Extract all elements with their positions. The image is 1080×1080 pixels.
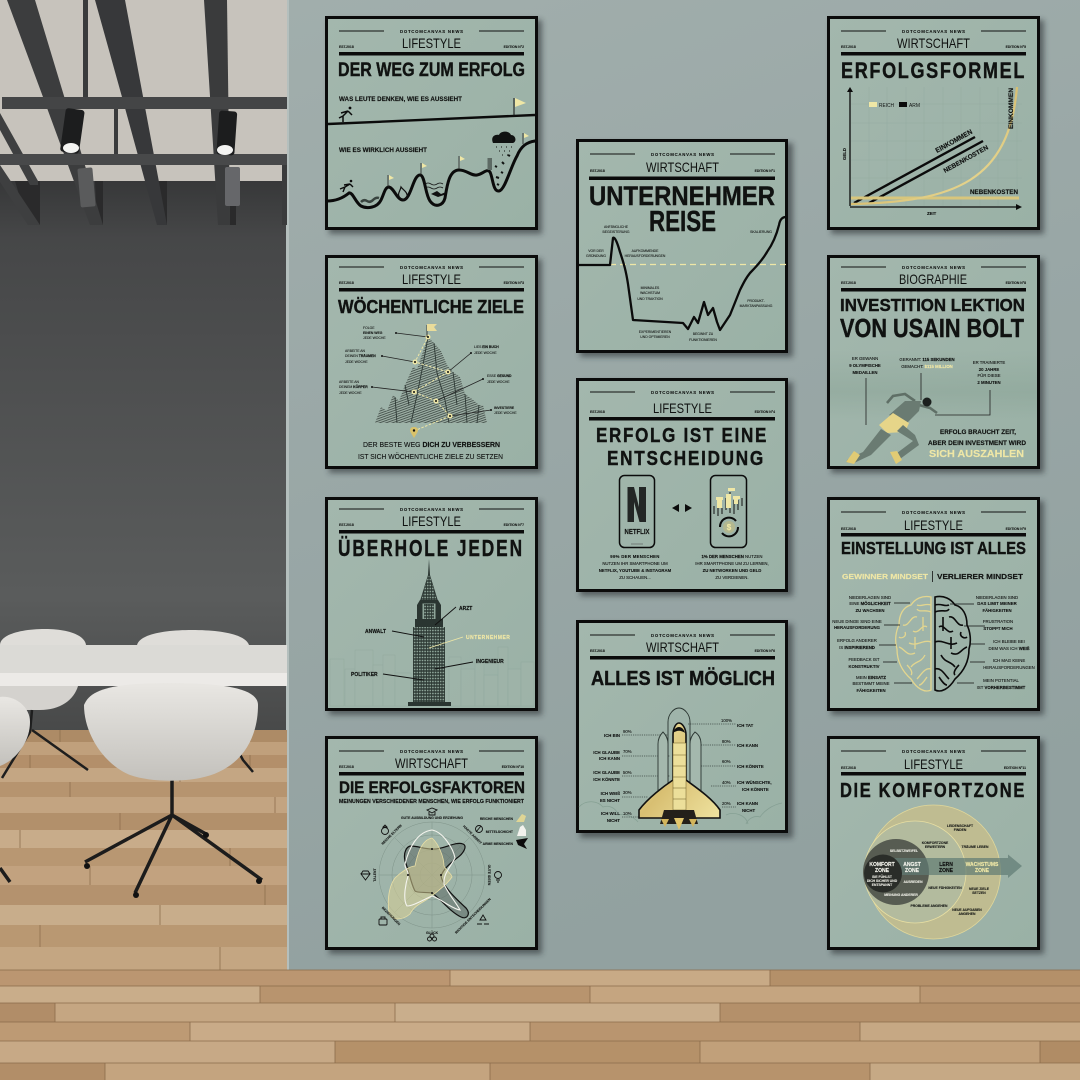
header: EST.2018 — [590, 410, 605, 414]
closing statement — [928, 429, 1026, 460]
flags and obstacles — [340, 132, 529, 202]
callouts: ARBEITE AN — [339, 380, 360, 384]
zone details: ANGEHEN — [959, 912, 976, 916]
title — [840, 295, 1025, 343]
callouts: JEDE WOCHE — [339, 391, 362, 395]
header: EST.2018 — [339, 523, 354, 527]
front chair — [0, 683, 262, 898]
right statements: FÄHIGKEITEN — [982, 608, 1012, 613]
right labels: 20% — [722, 801, 731, 806]
zone labels: ZONE — [939, 868, 954, 874]
brain: gold half — [896, 596, 931, 691]
journey labels: PRODUKT- — [747, 299, 765, 303]
zone details: ENTSPANNT — [872, 883, 893, 887]
left statements: IS INSPIRIEREND — [839, 645, 875, 650]
header: DOTCOMCANVAS NEWS — [902, 749, 965, 754]
header: EST.2018 — [339, 281, 354, 285]
callouts: JEDE WOCHE — [363, 336, 386, 340]
radar axis labels: GUTE AUSBILDUNG UND ERZIEHUNG — [401, 816, 463, 820]
right statements: DEM WAS ICH WEIß — [989, 646, 1030, 651]
text left: ZU SCHAUEN... — [619, 575, 651, 580]
header: EST.2018 — [841, 766, 856, 770]
header: EDITION N°6 — [755, 649, 775, 653]
header: EDITION N°1 — [755, 169, 775, 173]
zone details: LEIDENSCHAFT — [947, 824, 974, 828]
header: WIRTSCHAFT — [646, 159, 719, 175]
subtitle: MEINUNGEN VERSCHIEDENER MENSCHEN, WIE ERFOLG FUNKTIONIERT — [339, 799, 524, 805]
left labels: 70% — [623, 749, 632, 754]
journey labels: HERAUSFORDERUNGEN — [625, 254, 666, 258]
header: EDITION N°7 — [504, 523, 524, 527]
title: ERFOLG IST EINE — [596, 425, 768, 447]
left statements: ERFOLG ANDERER — [837, 638, 877, 643]
phone: investment: $ — [727, 523, 732, 532]
header: EST.2018 — [339, 765, 354, 769]
right labels: NICHT — [742, 808, 756, 813]
dotted guide lines — [622, 724, 736, 817]
header — [339, 749, 524, 776]
closing statement: ABER DEIN INVESTMENT WIRD — [928, 440, 1026, 447]
panel: Einstellung ist alles — [827, 497, 1040, 711]
text right: ZU NETWORKEN UND GELD — [703, 568, 761, 573]
left labels: 50% — [623, 770, 632, 775]
header: EDITION N°3 — [504, 281, 524, 285]
text left: NUTZEN IHR SMARTPHONE UM — [602, 561, 668, 566]
title: ALLES IST MÖGLICH — [591, 667, 775, 690]
header: EDITION N°10 — [502, 765, 524, 769]
winding path — [327, 141, 535, 208]
panel: Die Erfolgsfaktoren — [325, 736, 538, 950]
header: LIFESTYLE — [402, 35, 461, 51]
radar axis labels: BEZIEHUNGEN — [381, 906, 402, 927]
fact texts: 2 MINUTEN — [977, 380, 1001, 385]
journey labels: UND OPTIMIEREN — [640, 335, 670, 339]
left labels: 90% — [623, 729, 632, 734]
title: ERFOLGSFORMEL — [841, 58, 1026, 83]
fact texts: MEDAILLEN — [852, 370, 878, 375]
title — [589, 181, 775, 238]
header: WIRTSCHAFT — [897, 35, 970, 51]
fact texts: ER GEWANN — [852, 356, 878, 361]
fact texts — [849, 356, 1005, 385]
journey labels: ANFÄNGLICHE — [604, 225, 629, 229]
header — [841, 265, 1026, 292]
legend: ARM — [909, 103, 920, 109]
legend — [480, 814, 528, 849]
header: WIRTSCHAFT — [395, 755, 468, 771]
callouts: LIES EIN BUCH — [474, 345, 499, 349]
zone details: NEUE ZIELE — [969, 887, 990, 891]
header: DOTCOMCANVAS NEWS — [902, 510, 965, 515]
header: DOTCOMCANVAS NEWS — [651, 152, 714, 157]
header: LIFESTYLE — [402, 271, 461, 287]
journey labels: BEGINNT ZU — [693, 332, 714, 336]
journey labels: VOR DER — [588, 249, 604, 253]
left statements: HERAUSFORDERUNG — [834, 625, 881, 630]
left statements: EINE MÖGLICHKEIT — [849, 601, 891, 606]
left statements: NEUE DINGE SIND EINE — [832, 619, 882, 624]
title: WÖCHENTLICHE ZIELE — [338, 296, 524, 317]
phone: Netflix — [620, 476, 654, 548]
right labels: ICH WÜNSCHTE, — [737, 780, 772, 785]
header: LIFESTYLE — [402, 513, 461, 529]
right labels: 80% — [722, 739, 731, 744]
header: DOTCOMCANVAS NEWS — [400, 507, 463, 512]
header — [841, 29, 1026, 56]
phone: Netflix: NETFLIX — [624, 529, 650, 536]
title: INVESTITION LEKTION — [840, 295, 1025, 315]
legend — [869, 102, 920, 109]
panel: Wöchentliche Ziele — [325, 255, 538, 469]
fact texts: 9 OLYMPISCHE — [849, 363, 881, 368]
title: ÜBERHOLE JEDEN — [338, 535, 524, 561]
left statements: NIEDERLAGEN SIND — [849, 595, 891, 600]
winding path text: WIE ES WIRKLICH AUSSIEHT — [339, 147, 427, 154]
radar axis labels: TALENT — [373, 868, 377, 882]
clouds — [579, 802, 782, 824]
route and pins — [371, 324, 492, 438]
left statements: FÄHIGKEITEN — [856, 688, 886, 693]
zone labels: WACHSTUMS — [966, 862, 999, 868]
sprinter — [846, 394, 937, 464]
bottom text: IST SICH WÖCHENTLICHE ZIELE ZU SETZEN — [358, 453, 503, 461]
header: EST.2018 — [590, 649, 605, 653]
line chart — [847, 87, 1022, 210]
radar axis labels — [373, 816, 492, 935]
title: DIE ERFOLGSFAKTOREN — [339, 778, 525, 797]
radar chart — [379, 822, 485, 928]
fact texts: GEMACHT: $115 MILLION — [901, 364, 953, 369]
right statements: NIEDERLAGEN SIND — [976, 595, 1018, 600]
labels: ARZT — [459, 606, 472, 612]
header: EDITION N°4 — [755, 410, 775, 414]
right statements: ICH MAG KEINE — [993, 658, 1025, 663]
straight path text: WAS LEUTE DENKEN, WIE ES AUSSIEHT — [339, 96, 462, 103]
journey labels: BEGEISTERUNG — [603, 230, 630, 234]
header: DOTCOMCANVAS NEWS — [651, 633, 714, 638]
callouts: INVESTIERE — [494, 406, 515, 410]
callouts: JEDE WOCHE — [345, 360, 368, 364]
journey labels: SKALIERUNG — [750, 230, 772, 234]
header: EST.2018 — [339, 45, 354, 49]
journey labels: FUNKTIONIEREN — [689, 338, 717, 342]
text right: 1% DER MENSCHEN NUTZEN — [702, 554, 762, 559]
panel: Alles ist möglich — [576, 620, 788, 833]
header — [590, 633, 775, 660]
spotlights — [60, 108, 240, 208]
left floor planks — [0, 730, 287, 971]
title: EINSTELLUNG IST ALLES — [841, 538, 1026, 558]
mindset headings: GEWINNER MINDSET — [842, 572, 928, 581]
header: EDITION N°8 — [1006, 281, 1026, 285]
left labels: ICH BIN — [604, 733, 620, 738]
title: UNTERNEHMER — [589, 181, 775, 211]
closing statement: ERFOLG BRAUCHT ZEIT, — [940, 429, 1016, 436]
panel: Erfolgsformel — [827, 16, 1040, 230]
zone details: ERWEITERN — [925, 845, 946, 849]
legend: REICHE MENSCHEN — [480, 817, 514, 821]
labels: UNTERNEHMER — [466, 635, 510, 641]
chart labels: GELD — [842, 148, 847, 160]
panel: Investition Lektion von Usain Bolt — [827, 255, 1040, 469]
ceiling with beams — [0, 0, 287, 225]
rocket shuttle — [639, 708, 720, 830]
callouts: DEINEM KÖRPER — [339, 384, 368, 389]
title: DIE KOMFORTZONE — [840, 780, 1026, 802]
zone labels: ANGST — [903, 862, 921, 868]
panel: Überhole jeden — [325, 497, 538, 711]
header: LIFESTYLE — [653, 400, 712, 416]
right labels: ICH TAT — [737, 723, 754, 728]
left statements: FEEDBACK IST — [848, 657, 880, 662]
phone: investment — [710, 476, 746, 548]
journey labels: MINIMALES — [641, 286, 660, 290]
zone details: DICH SICHER UND — [867, 879, 898, 883]
zone details: FINDEN — [954, 828, 967, 832]
left labels: ES NICHT — [600, 798, 620, 803]
radar axis labels: HARTE ARBEIT — [462, 824, 483, 846]
journey labels: EXPERIMENTIEREN — [639, 330, 672, 334]
legend: ARME MENSCHEN — [483, 842, 514, 846]
title: DER WEG ZUM ERFOLG — [338, 59, 525, 81]
left labels: ICH KANN — [599, 756, 620, 761]
text left: NETFLIX, YOUTUBE & INSTAGRAM — [599, 568, 672, 573]
skyline — [330, 647, 534, 706]
left labels: NICHT — [607, 818, 620, 823]
right labels: ICH KANN — [737, 743, 758, 748]
header — [339, 29, 524, 56]
chart labels: NEBENKOSTEN — [970, 189, 1018, 196]
left labels: 10% — [623, 811, 632, 816]
background: light wall edge — [286, 0, 289, 971]
header: EDITION N°2 — [504, 45, 524, 49]
journey labels: GRÜNDUNG — [586, 254, 606, 258]
labels: ANWALT — [365, 629, 386, 635]
title: VON USAIN BOLT — [840, 313, 1024, 343]
right labels: 60% — [722, 759, 731, 764]
bottom text: DER BESTE WEG DICH ZU VERBESSERN — [363, 442, 500, 449]
right labels: ICH KANN — [737, 801, 758, 806]
chart labels: ZEIT — [927, 211, 937, 216]
back chairs — [0, 629, 253, 778]
header: DOTCOMCANVAS NEWS — [400, 265, 463, 270]
left labels — [593, 729, 632, 823]
left labels: 30% — [623, 790, 632, 795]
closing statement: SICH AUSZAHLEN — [929, 449, 1024, 460]
header — [339, 507, 524, 534]
labels: INGENIEUR — [476, 659, 504, 665]
journey labels — [586, 225, 773, 342]
header: WIRTSCHAFT — [646, 639, 719, 655]
panel: Der Weg zum Erfolg — [325, 16, 538, 230]
callouts: DEINEN TRÄUMEN — [345, 354, 376, 358]
header: DOTCOMCANVAS NEWS — [902, 265, 965, 270]
title: ENTSCHEIDUNG — [607, 448, 765, 470]
legend: REICH — [879, 103, 894, 109]
header: EDITION N°11 — [1004, 766, 1026, 770]
text left: 99% DER MENSCHEN — [610, 554, 660, 559]
panel: Die Komfortzone — [827, 736, 1040, 950]
header: EST.2018 — [841, 281, 856, 285]
text right: IHR SMARTPHONE UM ZU LERNEN, — [695, 561, 769, 566]
zone details: NEUE AUFGABEN — [952, 908, 982, 912]
zone labels: ZONE — [975, 868, 990, 874]
bottom text — [358, 442, 503, 461]
connector lines — [879, 603, 985, 683]
callouts: ARBEITE AN — [345, 349, 366, 353]
right statements: FRUSTRATION — [983, 619, 1013, 624]
callouts — [339, 326, 517, 415]
radar axis labels: REICHE ELTERN — [381, 823, 403, 846]
brain: black half — [935, 596, 970, 691]
legend: MITTELSCHICHT — [486, 830, 514, 834]
right statements: ICH BLEIBE BEI — [993, 639, 1025, 644]
header: EDITION N°5 — [1006, 45, 1026, 49]
fact texts: GERANNT: 115 SEKUNDEN — [899, 357, 955, 362]
chart labels — [842, 88, 1018, 216]
left labels: ICH KÖNNTE — [593, 777, 620, 782]
radar axis labels: GLÜCK — [426, 930, 439, 935]
labels — [351, 606, 510, 680]
journey labels: WACHSTUM — [640, 291, 660, 295]
header — [841, 510, 1026, 536]
right statements: HERAUSFORDERUNGEN — [983, 665, 1035, 670]
stadium background — [830, 350, 1037, 420]
zone labels: KOMFORT — [869, 862, 895, 868]
zone labels — [869, 862, 999, 874]
zone details — [867, 824, 990, 916]
header — [589, 390, 775, 420]
mindset headings: VERLIERER MINDSET — [937, 572, 1023, 581]
fact texts: FÜR DIESE — [978, 373, 1001, 378]
left statements: ZU WACHSEN — [856, 608, 884, 613]
table — [0, 645, 287, 686]
side chair — [0, 697, 30, 766]
left labels: ICH WEIß — [601, 791, 620, 796]
right labels: ICH KÖNNTE — [737, 764, 764, 769]
nested zones diagram — [863, 805, 1022, 939]
callouts: FOLGE — [363, 326, 375, 330]
header: DOTCOMCANVAS NEWS — [651, 390, 714, 395]
header — [589, 152, 775, 180]
callouts: JEDE WOCHE — [474, 351, 497, 355]
header: EST.2018 — [841, 527, 856, 531]
labels: POLITIKER — [351, 672, 378, 678]
left statements: BESTIMMT MEINE — [853, 681, 890, 686]
radar icons — [361, 808, 502, 941]
header: DOTCOMCANVAS NEWS — [902, 29, 965, 34]
header — [841, 749, 1026, 776]
text right — [695, 554, 769, 580]
right statements: DAS LIMIT MEINER — [977, 601, 1018, 606]
zone details: SELBSTZWEIFEL — [890, 849, 918, 853]
right statements: IST VORHERBESTIMMT — [977, 685, 1026, 690]
header: LIFESTYLE — [904, 517, 963, 533]
straight line with flag — [328, 98, 535, 124]
radar axis labels: GUTE IDEEN — [487, 865, 491, 886]
mountain illustration — [375, 337, 487, 423]
zone details: TRÄUME LEBEN — [962, 845, 989, 849]
right statements: STOPPT MICH — [983, 626, 1013, 631]
radar axis labels: RICHTIGE ENTSCHEIDUNGEN — [454, 897, 492, 935]
journey labels: AUFKOMMENDE — [632, 249, 659, 253]
header: EDITION N°9 — [1006, 527, 1026, 531]
background: right gallery wall — [289, 0, 1080, 971]
dashed average line — [610, 264, 786, 266]
zone labels: ZONE — [875, 868, 890, 874]
callouts: ESSE GESUND — [487, 374, 512, 378]
left labels: ICH GLAUBE — [593, 770, 620, 775]
right labels: 40% — [722, 780, 731, 785]
zone details: MEINUNG ANDERER — [884, 893, 918, 897]
title: REISE — [649, 206, 716, 238]
callouts: JEDE WOCHE — [487, 380, 510, 384]
skyscraper — [408, 559, 451, 706]
connector lines — [866, 373, 990, 425]
zone details: KOMFORTZONE — [922, 841, 949, 845]
poster shadows — [329, 20, 1044, 954]
zone details: AUSREDEN — [903, 880, 923, 884]
left labels: ICH WILL — [601, 811, 620, 816]
panel: Unternehmer Reise — [576, 139, 788, 353]
journey labels: MARKTANPASSUNG — [740, 304, 773, 308]
left statements: MEIN EINSATZ — [856, 675, 886, 680]
arrows — [672, 504, 692, 512]
journey curve — [579, 217, 786, 330]
chart labels: EINKOMMEN — [935, 129, 974, 155]
callouts: JEDE WOCHE — [494, 411, 517, 415]
chart labels: NEBENKOSTEN — [943, 144, 990, 175]
callouts: EINEN WEG — [363, 331, 383, 335]
fact texts: ER TRAINIERTE — [973, 360, 1005, 365]
zone labels: ZONE — [905, 868, 920, 874]
header: DOTCOMCANVAS NEWS — [400, 29, 463, 34]
right statements: MEIN POTENTIAL — [983, 678, 1020, 683]
zone details: NEUE FÄHIGKEITEN — [928, 886, 962, 890]
left statements — [832, 595, 891, 693]
right statements — [976, 595, 1035, 690]
right labels — [721, 718, 772, 813]
fact texts: 20 JAHRE — [979, 367, 999, 372]
bottom floor planks — [0, 970, 1080, 1080]
right labels: ICH KÖNNTE — [742, 787, 769, 792]
left statements: KONSTRUKTIV — [848, 664, 880, 669]
left labels: ICH GLAUBE — [593, 750, 620, 755]
chart labels: EINKOMMEN — [1008, 88, 1015, 129]
header: DOTCOMCANVAS NEWS — [400, 749, 463, 754]
zone details: SIE FÜHLST — [872, 874, 893, 879]
header: EST.2018 — [841, 45, 856, 49]
zone labels: LERN — [939, 862, 953, 868]
header: BIOGRAPHIE — [899, 271, 967, 287]
zone details: PROBLEME ANGEHEN — [910, 904, 948, 908]
zone details: SETZEN — [972, 891, 986, 895]
header: EST.2018 — [590, 169, 605, 173]
mindset headings — [842, 571, 1023, 582]
journey labels: UND TRAKTION — [637, 297, 663, 301]
header: LIFESTYLE — [904, 756, 963, 772]
header — [339, 265, 524, 292]
background: dark left wall — [0, 170, 287, 740]
title — [596, 425, 768, 470]
right labels: 100% — [721, 718, 732, 723]
text left — [599, 554, 672, 580]
text right: ZU VERDIENEN. — [715, 575, 749, 580]
panel: Erfolg ist eine Entscheidung — [576, 378, 788, 592]
